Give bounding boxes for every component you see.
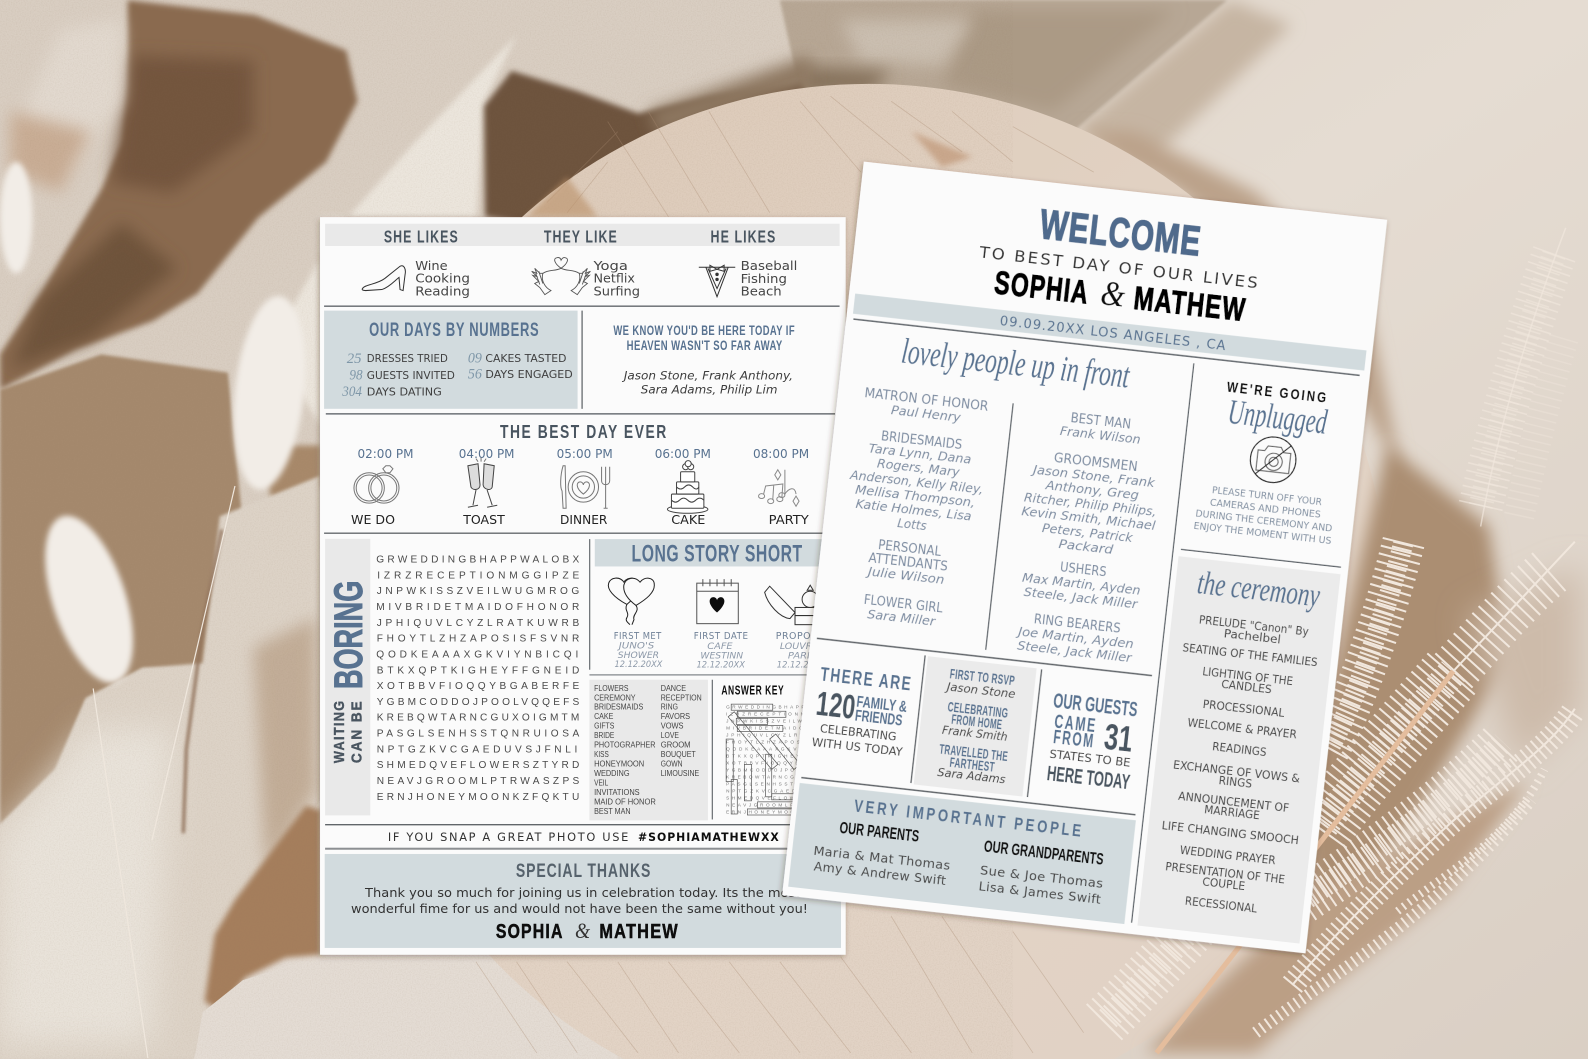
text: they like list: Yoga (592, 258, 628, 273)
text: heaven quote (613, 323, 795, 397)
wall shadow beside cloth (1076, 0, 1291, 167)
text: bride party column: ATTENDANTS (868, 551, 948, 575)
panel: answer key: YGBMCODDOJPOOLVQQEFS (726, 768, 840, 773)
panel: the ceremony: PRESENTATION OF THE (1165, 860, 1286, 887)
panel: answer key: SHMEDQVEFLOWERSZTYRD (726, 796, 840, 801)
panel: answer key: MIVBRIDETMAIDOFHONOR (726, 726, 840, 731)
panel: guest states count: 31 (1102, 716, 1135, 760)
text: groom party column: Steele, Jack Miller (1016, 638, 1133, 666)
panel: the best day ever timeline: TOAST (462, 512, 505, 527)
panel: special thanks: SPECIAL THANKS (516, 861, 651, 882)
panel: special thanks: MATHEW (599, 921, 679, 943)
text: he likes list: Baseball (741, 258, 797, 273)
text: she likes list: Cooking (415, 270, 470, 285)
title: welcome: WELCOME (1038, 200, 1204, 265)
panel: family and friends count: WITH US TODAY (811, 735, 904, 759)
panel: left card (320, 217, 846, 955)
text: bride party column: Julie Wilson (864, 563, 945, 587)
panel: very important people: OUR GRANDPARENTS (983, 836, 1105, 869)
panel: word list: VEIL (594, 777, 608, 787)
icon: doves with heart (532, 258, 590, 295)
icon: wedding rings (354, 466, 399, 503)
panel: the best day ever timeline: 06:00 PM (655, 447, 711, 462)
panel: our days by numbers: 25 (347, 350, 362, 367)
text: groom party column: Jason Stone, Frank (1029, 461, 1156, 490)
panel: right card (782, 162, 1387, 953)
text: groom party column: Steele, Jack Miller (1023, 584, 1139, 612)
panel: our days by numbers: OUR DAYS BY NUMBERS (369, 319, 539, 341)
brown patch left lower (0, 354, 243, 825)
panel: guest superlatives: Frank Smith (941, 724, 1008, 744)
text: bride party column: Paul Henry (890, 402, 962, 425)
word search puzzle: NPTGZKVCGAEDUVSJFNLI (377, 744, 577, 755)
panel: likes header bar: HE LIKES (711, 227, 776, 247)
panel: the ceremony: EXCHANGE OF VOWS & (1172, 758, 1301, 786)
panel: answer key: FHOYTLZHZAPOSISFSVNR (726, 740, 840, 745)
title: welcome (973, 194, 1266, 329)
panel: the ceremony: RECESSIONAL (1184, 894, 1258, 916)
panel: guest superlatives: FIRST TO RSVP (949, 666, 1016, 690)
panel: our days by numbers: 304 (341, 383, 362, 400)
panel: our days by numbers: DRESSES TRIED (367, 352, 448, 365)
panel: the ceremony: SEATING OF THE FAMILIES (1182, 640, 1318, 669)
panel: guest superlatives (914, 656, 1037, 797)
panel: the ceremony: the ceremony (1195, 565, 1322, 614)
panel: the ceremony: PROCESSIONAL (1202, 697, 1286, 720)
text: groom party column (1006, 407, 1168, 667)
panel: word list: INVITATIONS (594, 787, 640, 797)
text: she likes list: Wine (415, 258, 448, 273)
panel: answer key: ANSWER KEY (721, 683, 784, 698)
panel: very important people: Lisa & James Swift (978, 880, 1102, 907)
text: he likes list (741, 258, 797, 299)
panel: the ceremony: Pachelbel (1223, 626, 1282, 646)
panel: special thanks: & (575, 918, 591, 943)
icon: ring box (765, 585, 825, 625)
panel: word list: WEDDING (594, 768, 630, 778)
panel: guest states count: FROM (1052, 727, 1096, 752)
text: they like list: Surfing (593, 284, 640, 299)
text: first met: 12.12.20XX (615, 660, 663, 670)
text: bride party column: BRIDESMAIDS (880, 429, 963, 453)
panel: our days by numbers: DAYS DATING (367, 386, 442, 399)
text: bride party column: Katie Holmes, Lisa (855, 496, 972, 524)
panel: guest superlatives: CELEBRATING (947, 699, 1009, 722)
panel: the ceremony: PRELUDE "Canon" By (1198, 613, 1310, 639)
heading: lovely people up in front: lovely people up in front (900, 330, 1132, 396)
panel: the ceremony: WEDDING PRAYER (1179, 843, 1277, 867)
title: welcome: MATHEW (1132, 280, 1248, 328)
icon: calendar with heart (697, 579, 738, 624)
plant shadows (1301, 445, 1509, 952)
text: first met: SHOWER (618, 651, 659, 661)
text: proposal: 12.12.20XX (777, 660, 826, 670)
text: groom party column: Joe Martin, Ayden (1014, 623, 1135, 651)
panel: answer key: QODKEAAAXGKVIYNBICQI (726, 747, 840, 752)
panel: we're going unplugged: CAMERAS AND PHONES (1209, 498, 1321, 521)
text: bride party column: MATRON OF HONOR (864, 386, 989, 415)
panel: likes header bar (325, 224, 840, 247)
dark fold upper center (484, 71, 810, 223)
panel: special thanks: Thank you so much for joining us in celebration today. Its the most (364, 886, 800, 901)
panel: the best day ever timeline: 02:00 PM (358, 447, 414, 462)
panel: the ceremony: RINGS (1218, 773, 1253, 791)
panel: guest states count (1044, 688, 1139, 794)
panel: family and friends count: FAMILY & (856, 694, 908, 716)
panel: the best day ever timeline: PARTY (769, 512, 809, 527)
panel: answer key: JPHIQUVLCYZLRATKUWRB (726, 733, 840, 738)
linen cloth (0, 0, 1227, 1059)
panel: the ceremony: LIGHTING OF THE (1202, 664, 1294, 688)
icon: high heel shoe (362, 266, 405, 291)
wood plate (350, 84, 1387, 1059)
panel: our days by numbers: DAYS ENGAGED (485, 368, 573, 381)
ferns (1104, 228, 1575, 1033)
panel: very important people: VERY IMPORTANT PEOPLE (853, 795, 1085, 841)
word search puzzle: JNPWKISSZVEILWUGMROG (377, 586, 579, 597)
panel: word list: FLOWERS (594, 683, 629, 693)
text: groom party column: Ritcher, Philip Philips, (1023, 489, 1157, 519)
icon: champagne toast (468, 458, 497, 507)
text: they like list (592, 258, 640, 299)
text: bride party column: FLOWER GIRL (863, 593, 944, 616)
panel: special thanks: wonderful fime for us and would not have been the same without you! (351, 902, 808, 917)
word search puzzle: FHOYTLZHZAPOSISFSVNR (377, 634, 579, 645)
panel: the ceremony: ANNOUNCEMENT OF (1178, 789, 1290, 815)
text: he likes list: Fishing (741, 271, 787, 286)
word search puzzle (376, 555, 580, 803)
panel: word list: BEST MAN (594, 806, 631, 816)
panel: guest states count: STATES TO BE (1049, 747, 1131, 770)
word search puzzle: JPHIQUVLCYZLRATKUWRB (377, 618, 580, 629)
text: groom party column: Kevin Smith, Michael (1021, 503, 1157, 533)
word search puzzle: QODKEAAAXGKVIYNBICQI (376, 649, 578, 660)
text: first met: FIRST MET (614, 631, 662, 642)
panel: the ceremony: LIFE CHANGING SMOOCH (1161, 818, 1299, 848)
panel: our days by numbers (324, 311, 578, 409)
panel: word list: MAID OF HONOR (594, 796, 656, 806)
top left highlights (20, 20, 122, 182)
panel: the ceremony: READINGS (1212, 739, 1267, 759)
panel: family and friends count: CELEBRATING (819, 721, 897, 744)
title: welcome: SOPHIA (993, 264, 1091, 311)
text: groom party column: USHERS (1059, 561, 1107, 581)
text: proposal: LOUVRE (780, 642, 819, 652)
panel: word list: CEREMONY (594, 692, 636, 702)
title: welcome: TO BEST DAY OF OUR LIVES (977, 242, 1261, 293)
text: first date (694, 631, 748, 670)
panel: very important people: OUR PARENTS (839, 818, 920, 846)
text: proposal (776, 631, 831, 670)
panel: word list: GIFTS (594, 721, 614, 731)
text: heaven quote: Sara Adams, Philip Lim (641, 383, 777, 397)
word search puzzle: PASGLSENHSSTQNRUIOSA (377, 729, 580, 740)
date banner: 09.09.20XX LOS ANGELES , CA (999, 313, 1227, 354)
text: photo hashtag line (388, 831, 780, 844)
text: groom party column: Anthony, Greg (1044, 477, 1140, 503)
panel: we're going unplugged: PLEASE TURN OFF YOUR (1211, 485, 1322, 508)
panel: waiting can be boring sidebar: CAN BE (349, 700, 366, 763)
floor lower left (192, 911, 618, 1059)
panel: our days by numbers: 98 (349, 367, 363, 384)
icon: heart balloons (608, 578, 654, 625)
panel: guest superlatives: Jason Stone (944, 680, 1016, 701)
panel: guest superlatives: TRAVELLED THE (938, 742, 1009, 765)
panel: we're going unplugged (1193, 378, 1348, 547)
word search puzzle: MIVBRIDETMAIDOFHONOR (376, 602, 579, 613)
main stem (1157, 671, 1453, 1053)
title: welcome: & (1099, 274, 1127, 315)
panel: family and friends count: 120 (814, 685, 857, 727)
panel: word list (589, 680, 708, 820)
pale floor under shadow (194, 962, 598, 1059)
text: groom party column: BEST MAN (1070, 411, 1132, 433)
linen and wood grain (0, 0, 1013, 1059)
text: bride party column (833, 385, 993, 632)
panel: answer key: KREBQWTARNCGUXOIGMTM (726, 775, 840, 780)
text: heaven quote: HEAVEN WASN'T SO FAR AWAY (627, 338, 783, 354)
panel: our days by numbers: GUESTS INVITED (367, 369, 455, 382)
panel: we're going unplugged: WE'RE GOING (1226, 379, 1329, 407)
text: bride party column: Lotts (897, 515, 928, 533)
panel: our days by numbers: 56 (468, 366, 482, 383)
text: proposal: PARIS (788, 651, 817, 661)
text: bride party column: Anderson, Kelly Riley, (849, 467, 984, 497)
panel: answer key: BTKXQPTKIGHEYFFGNEID (726, 754, 840, 759)
icon: no camera (1248, 435, 1298, 485)
icon: tuxedo (699, 265, 735, 297)
panel: the ceremony (1137, 556, 1341, 944)
panel: we're going unplugged: ENJOY THE MOMENT WITH US (1193, 521, 1332, 547)
panel: answer key: NEAVJGROOMLPTRWASZPS (726, 803, 840, 808)
panel: waiting can be boring sidebar: WAITING (331, 700, 348, 763)
panel: the best day ever timeline: 08:00 PM (753, 447, 809, 462)
panel: waiting can be boring sidebar (325, 539, 371, 815)
icon: dinner plate (561, 466, 610, 508)
text: groom party column: Packard (1058, 536, 1115, 557)
panel: word list: PHOTOGRAPHER (594, 740, 655, 750)
panel: word list: LOVE (661, 730, 679, 740)
panel: family and friends count: FRIENDS (854, 707, 903, 730)
panel: likes header bar: SHE LIKES (384, 227, 459, 247)
panel: very important people (788, 783, 1136, 924)
text: groom party column: Frank Wilson (1059, 423, 1141, 447)
panel: we're going unplugged: DURING THE CEREMONY AND (1195, 508, 1333, 534)
panel: family and friends count: THERE ARE (819, 664, 913, 695)
text: groom party column: Peters, Patrick (1041, 520, 1134, 545)
panel: word list: FAVORS (661, 711, 690, 721)
panel: word list: KISS (594, 749, 609, 759)
panel: guest superlatives: FARTHEST (949, 755, 996, 775)
panel: special thanks (325, 854, 841, 948)
text: bride party column: Mellisa Thompson, (854, 482, 976, 510)
word search puzzle: IZRZRECEPTIONMGGIPZE (377, 570, 580, 581)
panel: guest states count: OUR GUESTS (1052, 688, 1139, 722)
text: groom party column: RING BEARERS (1033, 612, 1121, 637)
panel: word list: BOUQUET (661, 749, 696, 759)
text: bride party column: Tara Lynn, Dana (868, 440, 972, 467)
text: proposal: PROPOSAL (776, 631, 831, 642)
text: groom party column: GROOMSMEN (1053, 451, 1138, 475)
panel: answer key: NPTGZKVCGAEDUVSJFNLI (726, 789, 840, 794)
panel: word list: BRIDESMAIDS (594, 702, 643, 712)
text: bride party column: Rogers, Mary (876, 456, 961, 480)
text: photo hashtag line: IF YOU SNAP A GREAT PHOTO USE (388, 831, 630, 844)
panel: the best day ever timeline: 05:00 PM (557, 447, 613, 462)
panel: word list: RECEPTION (661, 692, 702, 702)
panel: answer key: XOTBBVFIOQQYBGABERFE (726, 761, 840, 766)
panel: word list: RING (661, 702, 678, 712)
word search puzzle: XOTBBVFIOQQYBGABERFE (377, 681, 580, 692)
panel: answer key: ERNJHONEYMOONKZFQKTU (726, 809, 840, 814)
panel: answer key: IZRZRECEPTIONMGGIPZE (726, 712, 840, 717)
word search puzzle: ERNJHONEYMOONKZFQKTU (377, 792, 579, 803)
text: she likes list (415, 258, 470, 299)
panel: very important people: Maria & Mat Thomas (813, 844, 951, 873)
top cloth right (780, 0, 1227, 130)
panel: answer key: GRWEDDINGBHAPPWALOBX (726, 705, 840, 710)
word search puzzle: KREBQWTARNCGUXOIGMTM (377, 713, 579, 724)
panel: guest states count: HERE TODAY (1046, 761, 1131, 794)
panel: answer key (721, 683, 840, 815)
panel: word list: HONEYMOON (594, 759, 644, 769)
plate cast shadow on wall (1076, 130, 1403, 476)
panel: guest states count: CAME (1053, 712, 1098, 737)
panel: guest superlatives: Sara Adams (937, 766, 1006, 786)
panel: long story short: LONG STORY SHORT (632, 540, 803, 567)
panel: the best day ever timeline: CAKE (671, 512, 705, 527)
date banner (853, 294, 1367, 371)
icon: music notes (759, 470, 799, 506)
panel: long story short (595, 539, 841, 670)
panel: the best day ever timeline: THE BEST DAY EVER (500, 422, 668, 442)
panel: likes header bar: THEY LIKE (544, 227, 618, 247)
text: heaven quote: Jason Stone, Frank Anthony, (622, 369, 793, 383)
text: he likes list: Beach (741, 284, 782, 299)
text: first date: WESTINN (700, 651, 743, 661)
icon: wedding cake (667, 461, 708, 513)
panel: we're going unplugged: Unplugged (1226, 393, 1329, 442)
panel: the best day ever timeline: DINNER (560, 512, 608, 527)
panel: very important people: Sue & Joe Thomas (979, 863, 1104, 891)
panel: waiting can be boring sidebar: BORING (327, 581, 371, 689)
text: heaven quote: WE KNOW YOU'D BE HERE TODAY IF (613, 323, 795, 339)
panel: word list: LIMOUSINE (661, 768, 699, 778)
text: they like list: Netflix (593, 270, 636, 285)
text: bride party column: PERSONAL (877, 538, 942, 560)
panel: answer key: JNPWKISSZVEILWUGMROG (726, 719, 840, 724)
panel: very important people: Amy & Andrew Swift (813, 860, 947, 888)
panel: our days by numbers: 09 (468, 349, 482, 366)
brown cast shadow lower left (205, 806, 320, 1011)
word search puzzle: GRWEDDINGBHAPPWALOBX (376, 555, 580, 566)
panel: word list: GOWN (661, 759, 682, 769)
panel: word list: CAKE (594, 711, 613, 721)
panel: the ceremony: MARRIAGE (1204, 802, 1261, 822)
text: first met (614, 631, 663, 670)
panel: the ceremony: CANDLES (1221, 677, 1273, 696)
panel: the best day ever timeline: 04:00 PM (459, 447, 514, 462)
panel: word list: VOWS (661, 721, 684, 731)
text: first date: 12.12.20XX (696, 660, 746, 670)
panel: the ceremony: COUPLE (1202, 874, 1246, 893)
panel: the ceremony: WELCOME & PRAYER (1187, 715, 1298, 741)
panel: our days by numbers: CAKES TASTED (485, 352, 566, 365)
panel: the best day ever timeline: WE DO (351, 512, 395, 527)
panel: word list: DANCE (661, 683, 686, 693)
text: bride party column: Sara Miller (867, 606, 937, 629)
text: first date: CAFE (707, 642, 733, 652)
dark brown diagonal fold (0, 0, 358, 390)
linen crease (183, 530, 222, 833)
text: first date: FIRST DATE (694, 631, 748, 642)
panel: the best day ever timeline (351, 422, 809, 527)
text: first met: JUNO'S (617, 641, 654, 651)
text: she likes list: Reading (415, 284, 470, 299)
panel: word list: BRIDE (594, 730, 614, 740)
panel: special thanks: SOPHIA (496, 921, 564, 943)
text: groom party column: Max Martin, Ayden (1022, 570, 1141, 598)
word search puzzle: NEAVJGROOMLPTRWASZPS (377, 776, 580, 787)
panel: word list: GROOM (661, 740, 691, 750)
pampas plumes (0, 162, 314, 693)
panel: guest superlatives: FROM HOME (951, 712, 1003, 734)
panel: answer key: PASGLSENHSSTQNRUIOSA (726, 782, 840, 787)
panel: family and friends count (811, 664, 913, 759)
pale fold wedge (271, 35, 517, 425)
text: photo hashtag line: #SOPHIAMATHEWXX (638, 831, 780, 844)
word search puzzle: SHMEDQVEFLOWERSZTYRD (377, 760, 579, 771)
word search puzzle: YGBMCODDOJPOOLVQQEFS (377, 697, 580, 708)
word search puzzle: BTKXQPTKIGHEYFFGNEID (377, 665, 579, 676)
linen lower left highlight (0, 476, 320, 1059)
